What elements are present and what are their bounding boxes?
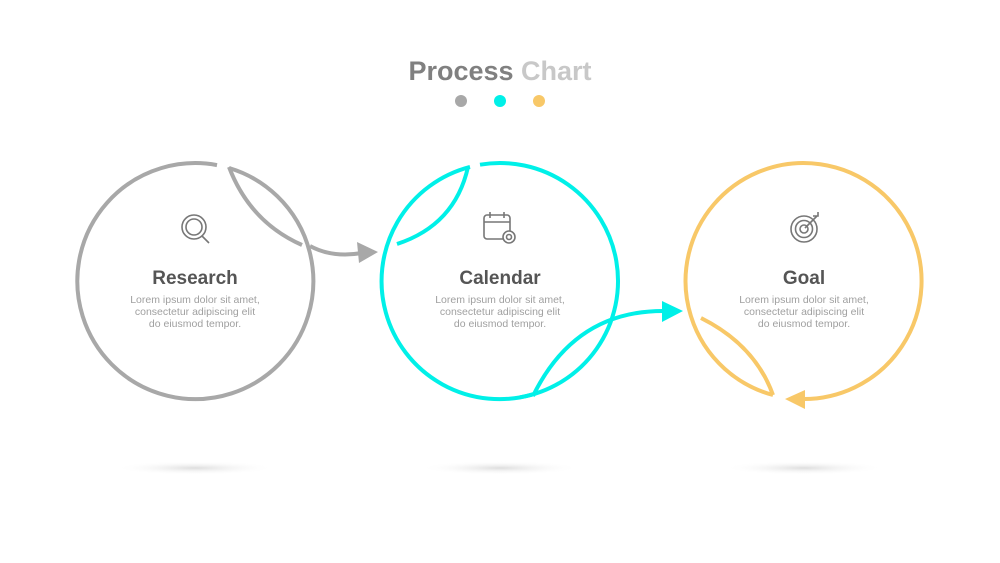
- icon: target: [791, 212, 818, 242]
- circle: goal: [686, 163, 922, 409]
- legend dots: [455, 95, 545, 107]
- text: research: consectetur adipiscing elit: [135, 306, 255, 318]
- text: goal: Goal: [783, 268, 825, 289]
- text: calendar: Calendar: [459, 268, 541, 289]
- text: research: do eiusmod tempor.: [149, 318, 241, 330]
- arrow: research to calendar: [310, 242, 378, 263]
- text: calendar: do eiusmod tempor.: [454, 318, 546, 330]
- circle: calendar: [382, 163, 683, 399]
- text: goal: do eiusmod tempor.: [758, 318, 850, 330]
- text: calendar: [435, 268, 565, 330]
- text: calendar: Lorem ipsum dolor sit amet,: [435, 294, 565, 306]
- text: goal: [739, 268, 869, 330]
- arrow: calendar to goal: [533, 301, 683, 396]
- text: research: [130, 268, 260, 330]
- shadows: [115, 461, 884, 475]
- circle: research: [77, 163, 378, 399]
- text: research: Research: [152, 268, 238, 289]
- text: goal: Lorem ipsum dolor sit amet,: [739, 294, 869, 306]
- title: Process Chart: [408, 56, 592, 86]
- arrowhead: goal loop: [785, 390, 805, 409]
- icon: magnifier: [182, 215, 209, 243]
- text: goal: consectetur adipiscing elit: [744, 306, 864, 318]
- icon: calendar: [484, 212, 515, 243]
- text: calendar: consectetur adipiscing elit: [440, 306, 560, 318]
- text: research: Lorem ipsum dolor sit amet,: [130, 294, 260, 306]
